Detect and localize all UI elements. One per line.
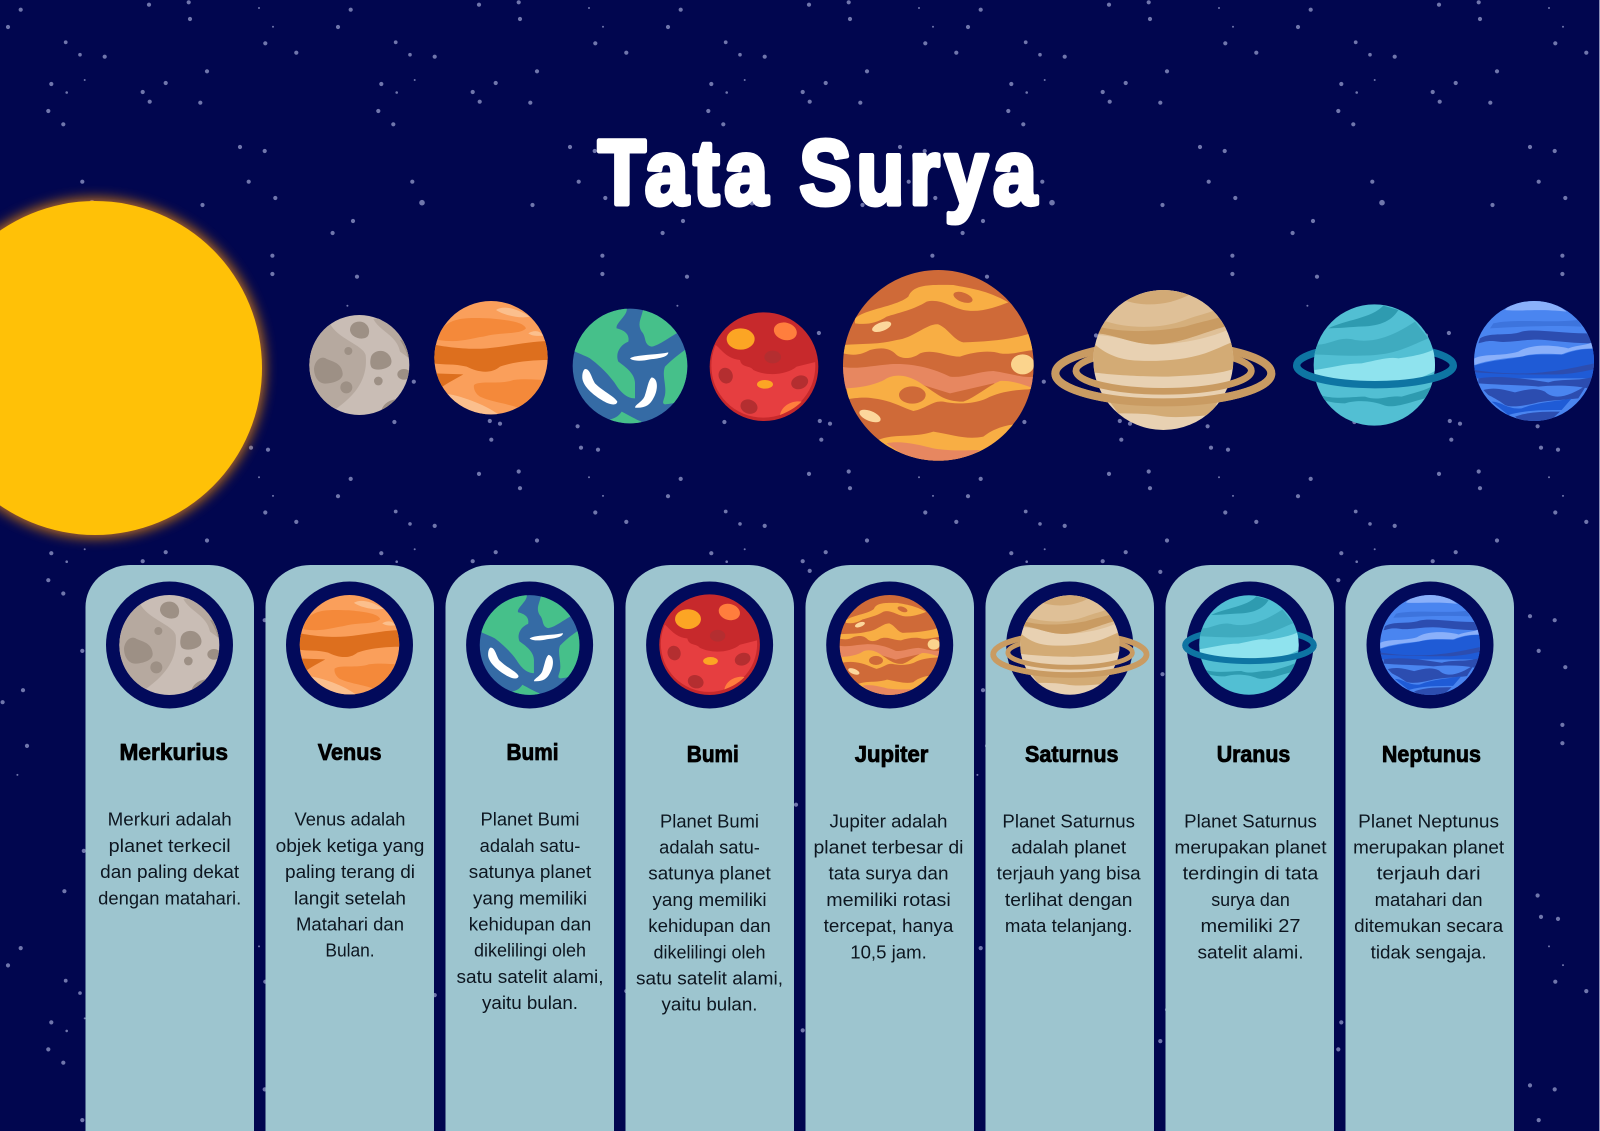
- card text: [276, 810, 424, 961]
- card text: Matahari dan: [296, 914, 404, 934]
- card text: [98, 810, 241, 908]
- planet: Saturnus: [1055, 285, 1271, 432]
- card text: yaitu bulan.: [482, 993, 578, 1013]
- card planet icon: [659, 594, 760, 699]
- card planet icon: [110, 592, 223, 698]
- card text: memiliki rotasi: [826, 890, 951, 910]
- card text: langit setelah: [294, 888, 406, 908]
- panel: Uranus card: [1166, 565, 1334, 1131]
- card text: kehidupan dan: [648, 916, 771, 936]
- card text: satunya planet: [648, 864, 771, 884]
- card planet circle: [1186, 582, 1314, 708]
- card text: matahari dan: [1375, 890, 1483, 910]
- card text: dan paling dekat: [100, 862, 239, 882]
- card text: satunya planet: [469, 862, 591, 882]
- panel: Jupiter card: [806, 565, 974, 1131]
- panel: Merkurius card: [86, 565, 254, 1131]
- card planet circle: [1006, 582, 1133, 708]
- card planet icon: [993, 592, 1147, 696]
- card text: [1353, 811, 1504, 962]
- card text: Planet Neptunus: [1358, 811, 1499, 831]
- card text: Bulan.: [325, 941, 375, 961]
- planet: Bumi: [567, 307, 690, 427]
- card heading: Bumi: [506, 739, 558, 765]
- card text: paling terang di: [285, 862, 415, 882]
- card text: merupakan planet: [1174, 838, 1326, 858]
- card text: mata telanjang.: [1005, 916, 1132, 936]
- panel: Neptunus card: [1346, 565, 1514, 1131]
- planet: Mars: [710, 312, 818, 425]
- card text: yang memiliki: [652, 890, 766, 910]
- card text: Planet Bumi: [480, 810, 580, 830]
- card heading: Jupiter: [855, 741, 928, 767]
- panel: Mars card: [626, 565, 794, 1131]
- card text: yang memiliki: [473, 888, 587, 908]
- card text: terjauh dari: [1377, 864, 1481, 884]
- card planet circle: [646, 582, 773, 708]
- card text: [636, 811, 783, 1015]
- planet: Uranus: [1297, 303, 1453, 428]
- card heading: Bumi: [687, 741, 739, 767]
- card text: terjauh yang bisa: [997, 864, 1142, 884]
- card text: memiliki 27: [1200, 916, 1300, 936]
- card text: Planet Saturnus: [1002, 811, 1135, 831]
- card text: satu satelit alami,: [636, 968, 783, 988]
- card text: satu satelit alami,: [456, 967, 604, 987]
- card text: tidak sengaja.: [1371, 942, 1487, 962]
- card text: Planet Bumi: [660, 811, 759, 831]
- card text: terlihat dengan: [1005, 890, 1132, 910]
- card text: Planet Saturnus: [1184, 811, 1317, 831]
- card text: tata surya dan: [828, 864, 948, 884]
- card planet icon: [475, 593, 582, 698]
- card text: surya dan: [1211, 890, 1290, 910]
- planet: Neptunus: [1473, 298, 1595, 422]
- card text: 10,5 jam.: [850, 942, 927, 962]
- card text: [997, 811, 1142, 936]
- card text: adalah satu-: [480, 836, 580, 856]
- card text: kehidupan dan: [469, 914, 591, 934]
- panel: Bumi card: [446, 565, 614, 1131]
- sun: [0, 198, 265, 538]
- card heading: Venus: [318, 739, 382, 765]
- planet: Merkurius: [300, 312, 413, 418]
- card text: ditemukan secara: [1354, 916, 1504, 936]
- card text: planet terbesar di: [814, 838, 964, 858]
- card text: dikelilingi oleh: [654, 942, 766, 962]
- card planet icon: [839, 594, 940, 696]
- card planet circle: [106, 582, 233, 708]
- card heading: Uranus: [1217, 741, 1290, 767]
- card planet circle: [1366, 582, 1494, 708]
- card planet circle: [826, 582, 953, 708]
- card text: Venus adalah: [294, 810, 406, 830]
- card text: Jupiter adalah: [830, 811, 948, 831]
- card planet icon: [299, 594, 401, 696]
- card heading: Neptunus: [1382, 741, 1481, 767]
- card text: satelit alami.: [1198, 942, 1304, 962]
- card text: terdingin di tata: [1183, 864, 1319, 884]
- card text: dikelilingi oleh: [474, 941, 586, 961]
- card text: dengan matahari.: [98, 888, 241, 908]
- card heading: Merkurius: [120, 739, 228, 765]
- card planet circle: [286, 582, 413, 708]
- card text: [456, 810, 604, 1013]
- card text: planet terkecil: [109, 836, 231, 856]
- panel: Saturnus card: [986, 565, 1154, 1131]
- card planet icon: [1379, 593, 1481, 696]
- title: Tata Surya: [598, 122, 1038, 224]
- card text: adalah planet: [1011, 838, 1126, 858]
- planet: Jupiter: [842, 268, 1035, 463]
- card text: tercepat, hanya: [824, 916, 954, 936]
- card text: adalah satu-: [659, 838, 760, 858]
- card text: [814, 811, 964, 962]
- card text: Merkuri adalah: [108, 810, 232, 830]
- card text: yaitu bulan.: [662, 995, 758, 1015]
- planet: Venus: [433, 300, 550, 417]
- card text: [1174, 811, 1326, 962]
- panel: Venus card: [266, 565, 434, 1131]
- card planet circle: [466, 582, 593, 708]
- card planet icon: [1185, 594, 1314, 697]
- card heading: Saturnus: [1025, 741, 1118, 767]
- card text: objek ketiga yang: [276, 836, 424, 856]
- card text: merupakan planet: [1353, 838, 1504, 858]
